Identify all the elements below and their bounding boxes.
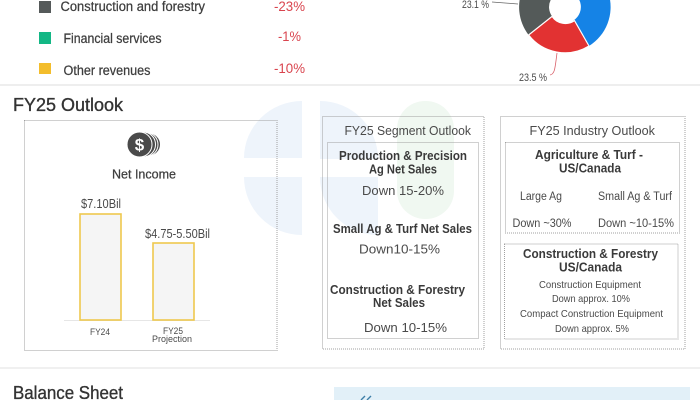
segment: small ag and turf: Down10-15% bbox=[359, 242, 440, 256]
sub-panel: agriculture and turf bbox=[506, 142, 680, 233]
bar: FY24: $7.10Bil bbox=[81, 197, 121, 211]
sub-panel: construction and forestry: Down approx. 10% bbox=[552, 293, 630, 305]
watermark logo bbox=[244, 101, 454, 235]
segment: construction and forestry bbox=[330, 283, 465, 335]
donut label 23.5 bbox=[519, 53, 557, 84]
panel: FY25 industry outlook: FY25 Industry Outlook bbox=[530, 124, 656, 138]
legend row: construction and forestry bbox=[39, 0, 305, 14]
sub-panel: agriculture and turf: Large Ag bbox=[520, 191, 562, 203]
icon: dollar coins: $ bbox=[135, 136, 145, 154]
sub-panel: agriculture and turf: Small Ag & Turf bbox=[598, 191, 673, 203]
heading: FY25 Outlook: FY25 Outlook bbox=[13, 94, 124, 115]
panel: net income bbox=[24, 120, 277, 350]
bar: FY24: FY24 bbox=[90, 327, 110, 338]
sub-panel: construction and forestry: Down approx. 5% bbox=[555, 323, 629, 335]
legend row: other revenues bbox=[39, 60, 305, 78]
segment: construction and forestry: Down 10-15% bbox=[364, 320, 447, 335]
segment: small ag and turf: Small Ag & Turf Net Sales bbox=[333, 222, 472, 236]
bar: FY25 projection: $4.75-5.50Bil bbox=[145, 227, 210, 241]
legend row: financial services: Financial services bbox=[64, 31, 162, 46]
segment: production and precision ag: Down 15-20% bbox=[362, 183, 444, 198]
segment: small ag and turf bbox=[333, 222, 472, 256]
sub-panel: agriculture and turf: Down ~10-15% bbox=[598, 218, 674, 230]
sub-panel: construction and forestry: US/Canada bbox=[559, 260, 623, 274]
sub-panel: agriculture and turf: Down ~30% bbox=[512, 218, 572, 230]
donut label 23.5: 23.5 % bbox=[519, 72, 547, 84]
sub-panel: construction and forestry bbox=[504, 244, 678, 339]
icon: quote mark bbox=[361, 396, 371, 400]
legend row: financial services: -1% bbox=[278, 28, 301, 44]
legend row: other revenues: Other revenues bbox=[64, 63, 151, 78]
icon: dollar coins bbox=[127, 132, 160, 157]
legend row: financial services bbox=[39, 28, 301, 46]
donut chart bbox=[462, 0, 611, 84]
sub-panel: construction and forestry: Compact Construction Equipment bbox=[520, 308, 663, 320]
sub-panel: agriculture and turf: US/Canada bbox=[559, 160, 622, 176]
donut label 23.1 bbox=[462, 0, 518, 11]
bar: FY25 projection: FY25 bbox=[163, 326, 183, 337]
segment: construction and forestry: Net Sales bbox=[373, 296, 425, 310]
panel: FY25 segment outlook: FY25 Segment Outlook bbox=[344, 124, 472, 138]
callout: quote panel bbox=[334, 387, 690, 400]
segment: production and precision ag: Production & Precision bbox=[339, 149, 467, 163]
legend row: other revenues: -10% bbox=[274, 60, 305, 76]
sub-panel: agriculture and turf: Agriculture & Turf - bbox=[535, 147, 643, 162]
revenue legend bbox=[39, 0, 305, 78]
panel: FY25 industry outlook bbox=[500, 116, 685, 349]
bar: FY25 projection: Projection bbox=[152, 334, 192, 345]
segment: construction and forestry: Construction & Forestry bbox=[330, 283, 465, 297]
sub-panel: construction and forestry: Construction & Forestry bbox=[523, 246, 659, 261]
heading: net income: Net Income bbox=[112, 166, 176, 182]
bar: FY25 projection bbox=[145, 227, 210, 345]
segment: production and precision ag: Ag Net Sales bbox=[369, 162, 437, 176]
bar chart bbox=[64, 197, 210, 345]
sub-panel: construction and forestry: Construction Equipment bbox=[539, 279, 641, 291]
panel: FY25 segment outlook bbox=[322, 116, 484, 349]
segment: production and precision ag bbox=[339, 149, 467, 198]
bar: FY24 bbox=[80, 197, 121, 338]
